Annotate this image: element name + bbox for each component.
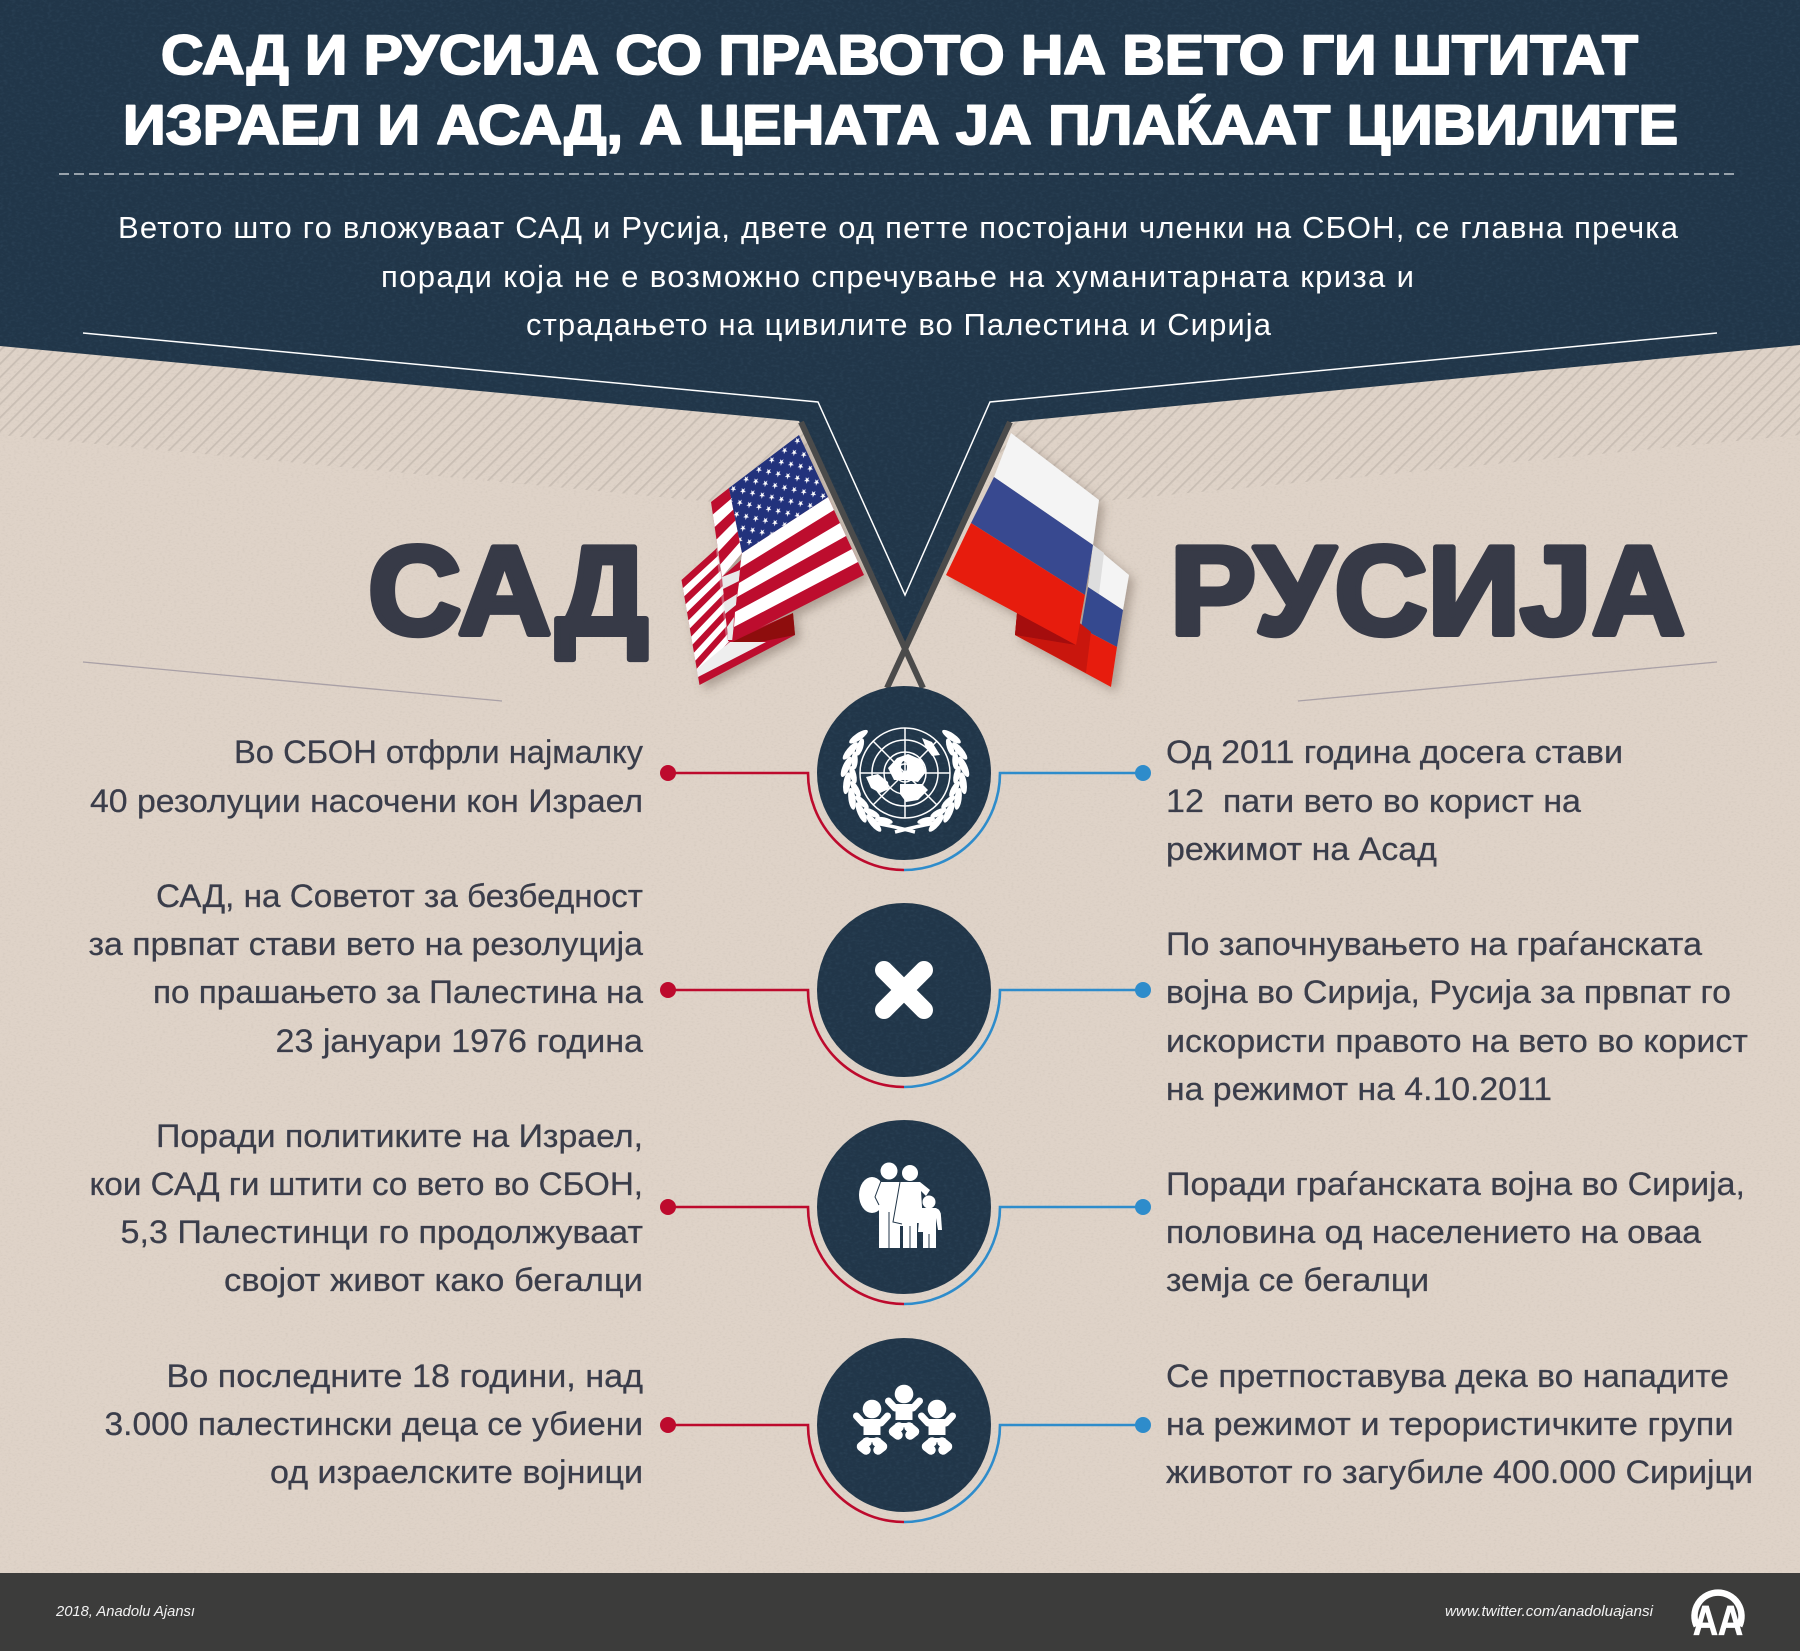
wreath right: [917, 728, 971, 834]
text right: 12 пати вето во корист на: [1166, 783, 1581, 819]
connector left: [660, 982, 904, 1087]
text right: војна во Сирија, Русија за првпат го: [1166, 974, 1731, 1010]
big label: Russia: РУСИЈА: [1170, 520, 1685, 661]
subtitle: поради која не е возможно спречување на хуманитарната криза и: [381, 259, 1414, 294]
text left: Во СБОН отфрли најмалку: [234, 734, 643, 770]
logo: AA: AA: [1693, 1597, 1743, 1644]
text right: [1166, 1358, 1753, 1490]
text right: [1166, 926, 1748, 1107]
icon circle: cross: [817, 903, 991, 1077]
connector right: [904, 1417, 1151, 1522]
flag: USA: [682, 435, 864, 685]
text right: По започнувањето на граѓанската: [1166, 926, 1702, 962]
text left: [90, 734, 643, 819]
row 1: veto left and right: [90, 686, 1623, 870]
title: [123, 23, 1678, 156]
panel: footer: [0, 1573, 1800, 1651]
footer credit: 2018, Anadolu Ajansı: [55, 1603, 195, 1620]
text left: [90, 1118, 643, 1298]
text left: својот живот како бегалци: [224, 1262, 643, 1298]
icon circle: family: [817, 1120, 991, 1294]
icon circle: babies: [817, 1338, 991, 1512]
panel: header: [0, 0, 1800, 646]
connector right: [904, 982, 1151, 1087]
hatched band: [0, 340, 1800, 511]
row 2: first veto: [88, 878, 1748, 1107]
text right: земја се бегалци: [1166, 1262, 1429, 1298]
connector right: [904, 765, 1151, 870]
subtitle: Ветото што го вложуваат САД и Русија, двете од петте постојани членки на СБОН, се главна пречка: [118, 210, 1679, 245]
text right: Се претпоставува дека во нападите: [1166, 1358, 1729, 1394]
text left: Поради политиките на Израел,: [156, 1118, 643, 1154]
connector left: [660, 1199, 904, 1304]
connector left: [660, 1417, 904, 1522]
wreath left: [839, 728, 893, 834]
icon circle: UN emblem: [817, 686, 991, 860]
text right: искористи правото на вето во корист: [1166, 1023, 1748, 1059]
text left: по прашањето за Палестина на: [153, 974, 643, 1010]
text left: 40 резолуции насочени кон Израел: [90, 783, 643, 819]
text left: Во последните 18 години, над: [166, 1358, 643, 1394]
title: ИЗРАЕЛ И АСАД, А ЦЕНАТА ЈА ПЛАЌААТ ЦИВИЛИТЕ: [123, 93, 1678, 156]
text right: Од 2011 година досега стави: [1166, 734, 1623, 770]
footer link: www.twitter.com/anadoluajansi: [1445, 1603, 1654, 1620]
text right: [1166, 1166, 1745, 1298]
text left: кои САД ги штити со вето во СБОН,: [90, 1166, 643, 1202]
text left: 23 јануари 1976 година: [276, 1023, 643, 1059]
text right: на режимот и терористичките групи: [1166, 1406, 1734, 1442]
subtitle: [118, 210, 1679, 342]
text left: 3.000 палестински деца се убиени: [104, 1406, 643, 1442]
text left: [88, 878, 643, 1059]
text right: животот го загубиле 400.000 Сиријци: [1166, 1454, 1753, 1490]
text right: половина од населението на оваа: [1166, 1214, 1701, 1250]
text right: на режимот на 4.10.2011: [1166, 1071, 1552, 1107]
text left: САД, на Советот за безбедност: [156, 878, 643, 914]
text right: [1166, 734, 1623, 867]
row 4: casualties: [104, 1338, 1753, 1522]
title: САД И РУСИЈА СО ПРАВОТО НА ВЕТО ГИ ШТИТАТ: [161, 23, 1638, 86]
text right: режимот на Асад: [1166, 831, 1437, 867]
subtitle: страдањето на цивилите во Палестина и Сирија: [526, 307, 1272, 342]
connector right: [904, 1199, 1151, 1304]
text left: 5,3 Палестинци го продолжуваат: [120, 1214, 643, 1250]
connector left: [660, 765, 904, 870]
row 3: refugees: [90, 1118, 1745, 1304]
big label: USA: САД: [368, 520, 648, 661]
text left: за првпат стави вето на резолуција: [88, 926, 643, 962]
text left: од израелските војници: [270, 1454, 643, 1490]
text left: [104, 1358, 643, 1490]
flag poles: [801, 422, 1010, 688]
text right: Поради граѓанската војна во Сирија,: [1166, 1166, 1745, 1202]
flag: Russia: [946, 433, 1129, 687]
